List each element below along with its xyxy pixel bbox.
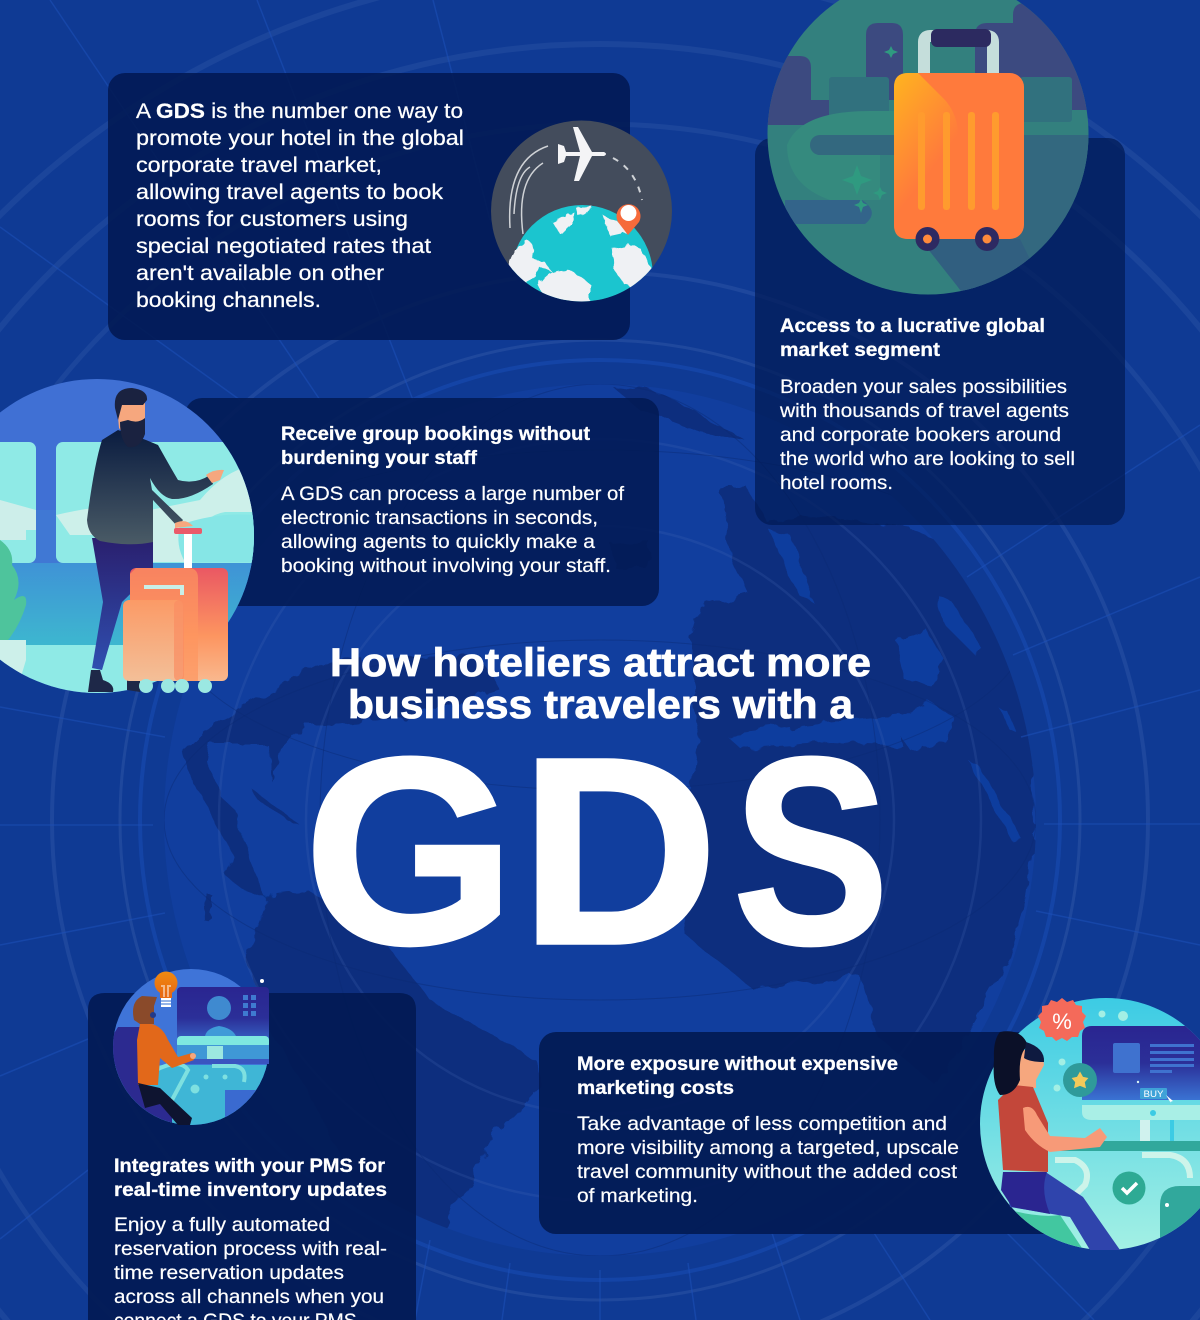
intro text [136, 99, 464, 312]
body text [114, 1214, 387, 1320]
body text: booking without involving your staff. [281, 555, 611, 577]
panel: Receive group bookings without burdening your staff [185, 398, 659, 606]
suitcase body [894, 73, 1024, 251]
woman [994, 1031, 1120, 1250]
heading: market segment [780, 339, 941, 361]
star badge [1063, 1063, 1097, 1097]
intro text: aren't available on other [136, 261, 384, 285]
big GDS heading: D [520, 703, 718, 1000]
land shapes follow [184, 655, 543, 1248]
percent badge [1038, 998, 1086, 1041]
panel: GDS is the number one way [108, 73, 630, 340]
light bulb [154, 972, 178, 1007]
body text [577, 1113, 959, 1207]
body text: across all channels when you [114, 1286, 384, 1308]
body text: reservation process with real- [114, 1238, 387, 1260]
man [87, 388, 224, 692]
heading: marketing costs [577, 1077, 734, 1099]
body text: A GDS can process a large number of [281, 483, 625, 505]
suitcase [123, 528, 228, 693]
agent [133, 996, 196, 1125]
panel: More exposure without expensive marketing costs [539, 1032, 1069, 1234]
dot [260, 979, 264, 983]
body text: hotel rooms. [780, 472, 893, 494]
panel: Access to a lucrative global market segment [755, 138, 1125, 525]
body text [779, 376, 1075, 494]
title [330, 641, 871, 727]
body text: time reservation updates [114, 1262, 344, 1284]
heading: Integrates with your PMS for [114, 1155, 385, 1177]
title: How hoteliers attract more [330, 641, 871, 685]
big GDS heading: G [304, 703, 515, 1000]
big GDS heading [304, 703, 889, 1000]
BUY button [1140, 1088, 1167, 1099]
percent badge: % [1052, 1009, 1072, 1034]
intro text: A GDS is the number one way to [136, 99, 463, 123]
heading: More exposure without expensive [577, 1053, 898, 1075]
heading: real-time inventory updates [114, 1179, 387, 1201]
big GDS heading: S [733, 703, 889, 1000]
body text: Take advantage of less competition and [577, 1113, 947, 1135]
map pin [616, 204, 640, 235]
intro text: allowing travel agents to book [136, 180, 443, 204]
body text: electronic transactions in seconds, [281, 507, 598, 529]
icon: traveller with suitcase [0, 379, 254, 693]
heading: Access to a lucrative global [780, 315, 1045, 337]
body text: more visibility among a targeted, upscale [577, 1137, 959, 1159]
body text: of marketing. [577, 1185, 698, 1207]
suitcase handle [924, 29, 993, 73]
body text: allowing agents to quickly make a [281, 531, 595, 553]
icon: woman buying online [980, 998, 1200, 1260]
intro text: special negotiated rates that [136, 234, 431, 258]
body text: with thousands of travel agents [779, 400, 1069, 422]
check badge [1112, 1172, 1146, 1204]
icon: globe with plane and pin [491, 120, 672, 302]
intro text: booking channels. [136, 288, 321, 312]
body text: and corporate bookers around [780, 424, 1061, 446]
body text [281, 483, 625, 577]
heading [780, 315, 1045, 361]
title: business travelers with a [348, 683, 854, 727]
panel: Integrates with your PMS [88, 993, 416, 1320]
heading [281, 423, 591, 469]
heading [577, 1053, 898, 1099]
heading [114, 1155, 387, 1201]
body text: Broaden your sales possibilities [780, 376, 1067, 398]
icon: suitcase in green circle [767, 0, 1100, 296]
body text: Enjoy a fully automated [114, 1214, 330, 1236]
plane [558, 127, 606, 181]
intro text: rooms for customers using [136, 207, 408, 231]
body text: the world who are looking to sell [780, 448, 1075, 470]
monitor [177, 987, 269, 1064]
intro text: promote your hotel in the global [136, 126, 464, 150]
flight path [510, 146, 642, 234]
heading: burdening your staff [281, 447, 478, 469]
heading: Receive group bookings without [281, 423, 591, 445]
icon: agent at computer [110, 969, 273, 1130]
intro text: corporate travel market, [136, 153, 382, 177]
BUY button: BUY [1144, 1089, 1164, 1099]
body text: travel community without the added cost [577, 1161, 958, 1183]
